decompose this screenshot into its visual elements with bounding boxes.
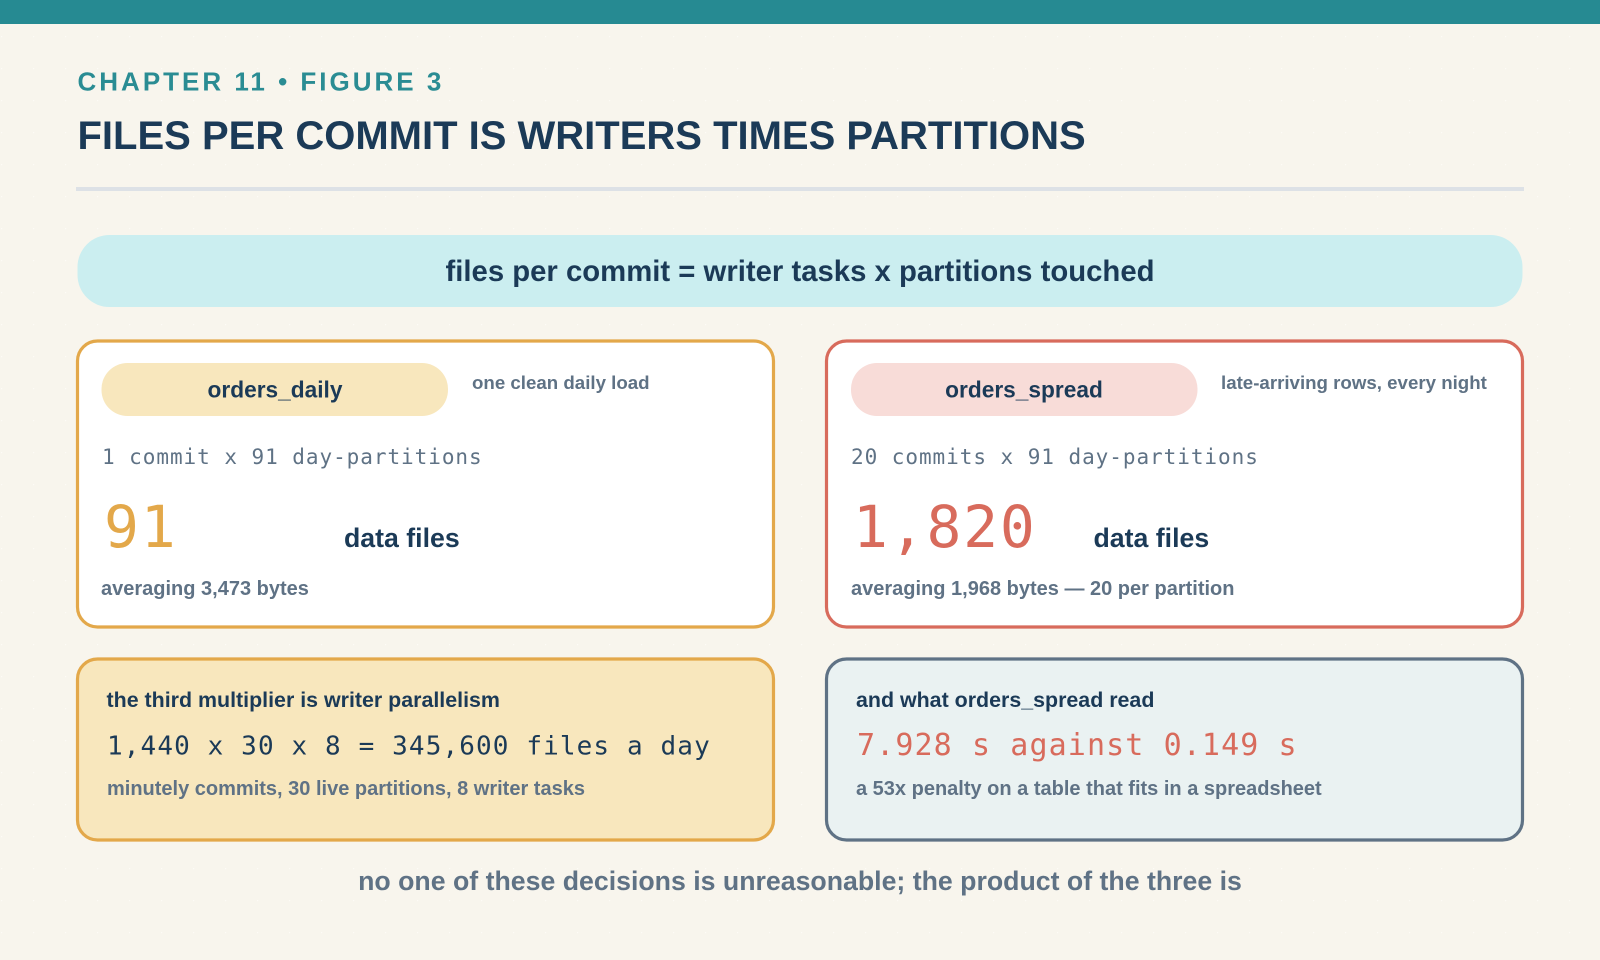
- formula: 20 commits x 91 day-partitions: [851, 445, 1259, 469]
- heading: the third multiplier is writer parallelism: [106, 688, 500, 712]
- average: averaging 1,968 bytes — 20 per partition: [851, 578, 1234, 600]
- big number: 1,820: [853, 493, 1037, 561]
- big number: 91: [104, 493, 177, 561]
- title: FILES PER COMMIT IS WRITERS TIMES PARTITIONS: [78, 114, 1086, 158]
- table label: orders_spread: [851, 363, 1198, 416]
- equation: 1,440 x 30 x 8 = 345,600 files a day: [107, 732, 711, 762]
- formula banner: [78, 235, 1522, 307]
- comparison: 7.928 s against 0.149 s: [857, 728, 1298, 763]
- table label: orders_daily: orders_daily: [208, 376, 343, 402]
- panel: orders_spread: [826, 341, 1522, 627]
- top bar: [0, 0, 1600, 24]
- table label: orders_daily: [102, 363, 448, 416]
- formula banner: files per commit = writer tasks x partitions touched: [445, 255, 1155, 288]
- unit: data files: [1094, 523, 1209, 553]
- average: averaging 3,473 bytes: [101, 578, 309, 600]
- heading: and what orders_spread read: [856, 688, 1154, 712]
- note: minutely commits, 30 live partitions, 8 writer tasks: [107, 778, 585, 800]
- panel: writer parallelism: [78, 659, 774, 840]
- eyebrow: CHAPTER 11 • FIGURE 3: [78, 66, 444, 96]
- formula: 1 commit x 91 day-partitions: [102, 445, 483, 469]
- table label: orders_spread: orders_spread: [945, 376, 1103, 402]
- note: one clean daily load: [472, 372, 650, 393]
- closing line: no one of these decisions is unreasonable; the product of the three is: [358, 866, 1242, 896]
- panel: orders_daily: [78, 341, 774, 627]
- note: late-arriving rows, every night: [1221, 372, 1487, 393]
- panel: read penalty: [826, 659, 1522, 840]
- unit: data files: [344, 523, 460, 553]
- note: a 53x penalty on a table that fits in a spreadsheet: [856, 778, 1322, 800]
